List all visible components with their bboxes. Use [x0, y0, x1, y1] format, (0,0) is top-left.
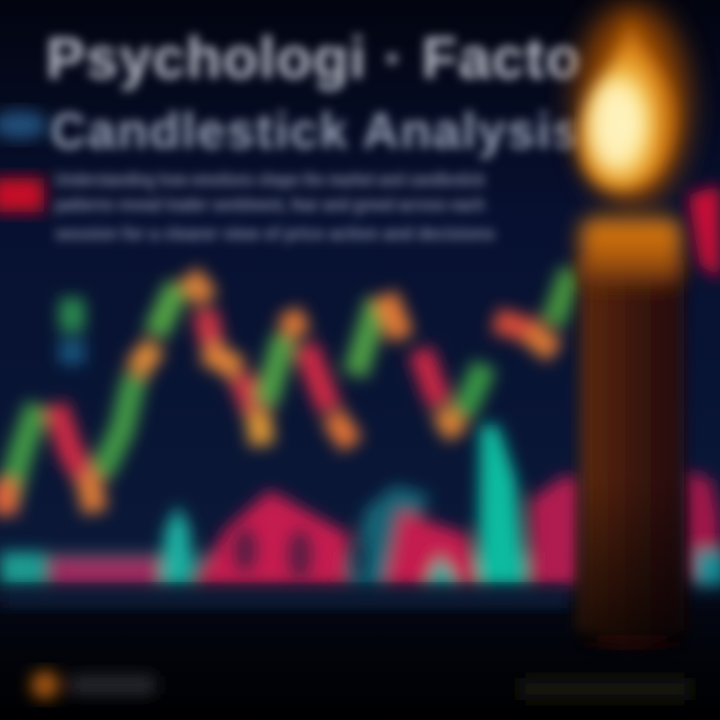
candle glow — [576, 5, 688, 205]
candle — [576, 5, 688, 650]
red accent right of candle — [688, 185, 720, 280]
first rise and fall — [5, 275, 208, 515]
title: Psychologi · Facto — [46, 26, 581, 91]
candle base shadow — [578, 480, 686, 650]
description text — [55, 170, 495, 245]
icon: blue marker beside title — [0, 111, 48, 139]
title — [46, 26, 581, 159]
description text: patterns reveal trader sentiment, fear and greed across each — [55, 195, 485, 216]
faint lower reflection band — [0, 588, 570, 608]
main peaks — [205, 295, 485, 445]
description text: session for a clearer view of price action and decisions — [55, 224, 495, 245]
right segment near candle — [495, 270, 572, 352]
candle top rim — [580, 218, 682, 286]
dark mottling over volume — [233, 528, 370, 580]
candle body — [580, 260, 684, 645]
footer logo — [31, 671, 155, 699]
footer text — [520, 678, 690, 700]
volume area chart — [0, 425, 720, 585]
small green and blue candle — [60, 298, 84, 364]
title: Candlestick Analysis — [50, 103, 580, 159]
flame — [579, 12, 676, 190]
icon: red badge — [0, 178, 44, 212]
description text: Understanding how emotions shape the market and candlestick — [55, 170, 485, 191]
line chart: candlestick trend — [5, 270, 572, 515]
flame core — [590, 81, 642, 169]
